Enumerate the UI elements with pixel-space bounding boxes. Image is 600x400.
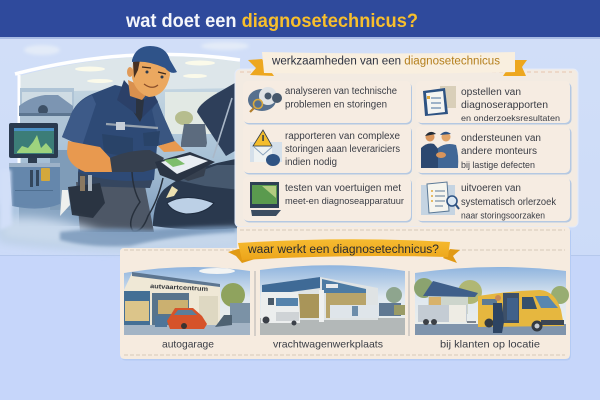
arms — [67, 141, 112, 172]
photo: bij klanten op locatie — [414, 267, 569, 335]
label: vrachtwagenwerkplaats: vrachtwagenwerkplaats — [273, 338, 383, 350]
icon: gears and magnifier — [248, 87, 282, 112]
label: bij klanten op locatie: bij klanten op locatie — [440, 338, 540, 350]
card: ondersteunen: ondersteunen van — [461, 133, 541, 144]
icon: checklist and magnifier — [421, 182, 459, 215]
card: ondersteunen — [416, 126, 572, 174]
card: ondersteunen: bij lastige defecten — [461, 160, 535, 171]
car on lift — [19, 95, 74, 116]
icon: clipboard report — [423, 86, 456, 116]
card: uitvoeren: systematisch orlerzoek — [461, 197, 557, 208]
card: analyseren — [243, 81, 412, 124]
tablet — [155, 152, 215, 182]
shirt — [62, 85, 175, 181]
card: opstellen: diagnoserapporten — [461, 100, 548, 111]
watercolor fade — [0, 217, 240, 250]
card: uitvoeren: uitvoeren van — [461, 183, 521, 194]
tool belt — [60, 175, 105, 218]
cap — [132, 46, 177, 73]
photo: autogarage: autvaartcentrum — [150, 283, 208, 293]
panel: werkzaamheden — [235, 52, 578, 227]
trousers — [76, 182, 154, 232]
card: testen — [243, 177, 412, 222]
label: autogarage: autogarage — [162, 338, 214, 350]
mechanic — [60, 46, 215, 232]
watercolor wash behind scene — [0, 202, 240, 249]
card: testen: testen van voertuigen met — [285, 183, 401, 194]
icon: computer — [250, 182, 281, 216]
card: analyseren: problemen en storingen — [285, 100, 387, 110]
card: analyseren: analyseren van technische — [285, 86, 397, 97]
cable — [131, 172, 163, 231]
card: rapporteren: storingen aaan leverariciers — [285, 144, 400, 155]
card: uitvoeren: naar storingsoorzaken — [461, 210, 545, 220]
card: rapporteren: indien nodig — [285, 157, 337, 168]
card: rapporteren: rapporteren van complexe — [285, 131, 400, 142]
header band — [0, 0, 600, 39]
card: opstellen — [416, 81, 572, 124]
illustration: mechanic in workshop — [0, 46, 240, 250]
panel: waar werkt — [120, 227, 571, 360]
card: opstellen: en onderzoeksresultaten — [461, 113, 560, 123]
ribbon heading — [248, 52, 527, 76]
card: testen: meet-en diagnoseapparatuur — [285, 196, 404, 207]
undershirt and collar — [130, 98, 150, 122]
workshop backdrop — [15, 54, 240, 226]
card: ondersteunen: andere monteurs — [461, 146, 537, 157]
icon: two mechanics — [421, 132, 458, 168]
parked car — [181, 124, 207, 147]
ribbon heading — [228, 239, 460, 263]
photo: vrachtwagenwerkplaats — [260, 265, 405, 335]
card: uitvoeren — [416, 177, 572, 222]
photo: autogarage — [124, 267, 250, 335]
title: wat doet een diagnosetechnicus? — [125, 11, 418, 32]
card: opstellen: opstellen van — [461, 87, 521, 98]
card: rapporteren — [243, 125, 412, 174]
open car hood — [153, 80, 240, 230]
ribbon heading: werkzaamheden van een diagnosetechnicus — [271, 56, 500, 68]
gloved hands — [110, 150, 164, 172]
dividers — [255, 271, 409, 336]
diagnostic monitor and cart — [9, 123, 60, 209]
neck and face — [128, 80, 150, 100]
icon: warning and documents — [250, 130, 282, 166]
ribbon heading: waar werkt een diagnosetechnicus? — [247, 244, 439, 256]
